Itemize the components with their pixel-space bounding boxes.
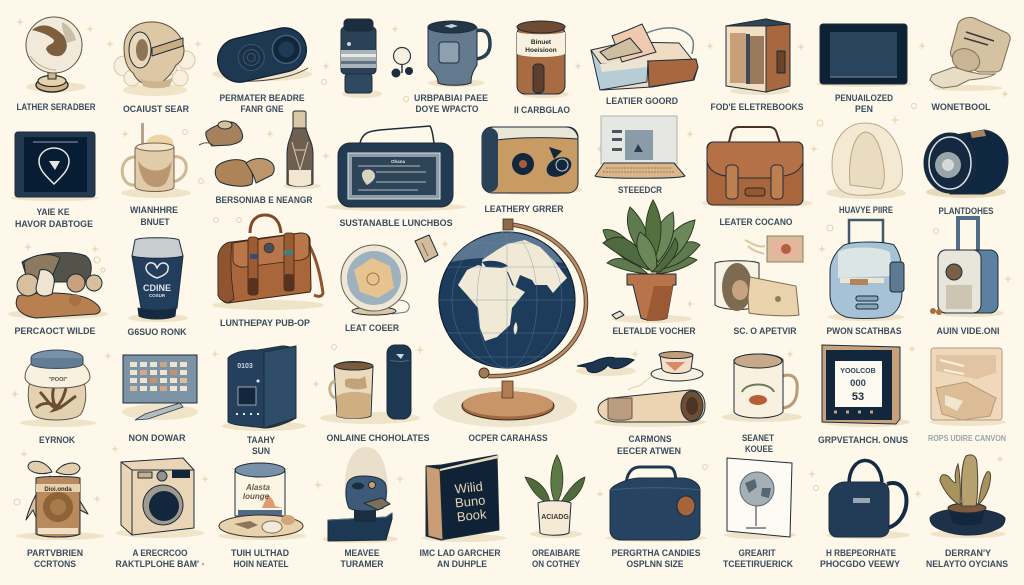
- label: leat coeer: LEAT COEER: [345, 323, 399, 334]
- icon: teacup on saucer: [651, 352, 703, 381]
- label: derran'y nelayto oycians: DERRAN'Y: [945, 548, 992, 559]
- label: permater beadre: [220, 93, 304, 115]
- label: eletalde vocher: ELETALDE VOCHER: [612, 326, 696, 337]
- label: onlaine chohokates: ONLAINE CHOHOLATES: [326, 433, 430, 444]
- label: pwon scathbas: PWON SCATHBAS: [826, 326, 902, 337]
- icon: small leather tag: [415, 235, 438, 262]
- icon: framed display with numbers: [822, 345, 910, 427]
- label: derran'y nelayto oycians: [926, 548, 1008, 570]
- icon: wrapped gift with bow: Dioi.onda: [44, 487, 72, 493]
- icon: retro boombox: [482, 127, 582, 195]
- label: penualiozed pen: [835, 93, 893, 115]
- icon: cactus on base: [930, 455, 1006, 538]
- label: meavee turamer: [340, 548, 384, 570]
- icon: laptop: [595, 116, 685, 178]
- icon: wild bunno book: [422, 455, 506, 542]
- icon: tan podcast head with bubbles: [114, 22, 195, 96]
- label: huavye piire: HUAVYE PIIRE: [839, 205, 893, 216]
- icon: brown briefcase: [702, 127, 812, 208]
- icon: leather satchel: [212, 215, 324, 310]
- label: bersoniab e neangr: BERSONIAB E NEANGR: [216, 195, 313, 206]
- label: grearit tceetiruerick: TCEETIRUERICK: [723, 559, 793, 570]
- label: partvbrien ccrtons: CCRTONS: [34, 559, 76, 570]
- icon: can with food plate: lounge: [243, 492, 270, 501]
- label: auin video.oni: AUIN VIDE.ONI: [936, 326, 1000, 337]
- label: a erecrcoo raktlplohe bam: [116, 548, 204, 570]
- label: ocper carahass: OCPER CARAHASS: [468, 433, 548, 444]
- label: grearit tceetiruerick: GREARIT: [738, 548, 776, 559]
- label: wianhhre bnuet: WIANHHRE: [130, 205, 178, 216]
- label: steeedcr: STEEEDCR: [618, 185, 662, 196]
- icon: cream mug with illustration: [722, 354, 802, 422]
- chart: central world globe: [433, 219, 586, 427]
- icon: steel blue mug: [428, 21, 490, 87]
- label: seanet kouee: [742, 433, 774, 455]
- label: eyrnok: EYRNOK: [39, 435, 75, 446]
- label: urbpabiai paee: DOYE WPACTO: [416, 104, 478, 115]
- icon: framed display with numbers: 53: [852, 391, 864, 403]
- icon: dark tablet: [816, 24, 912, 87]
- icon: paper parcel box: [930, 348, 1006, 426]
- icon: navy tumbler: COSUR: [149, 293, 166, 298]
- label: yaie ke havor dabtoge: [15, 207, 93, 230]
- label: tuih ulthad hoin neatel: [231, 548, 289, 570]
- icon: toy robot under dome: [322, 447, 398, 543]
- label: meavee turamer: MEAVEE: [344, 548, 380, 559]
- label: a erecrcoo raktlplohe bam: A ERECRCOO: [132, 548, 188, 559]
- label: oreaibare on cothey: ON COTHEY: [532, 559, 581, 570]
- icon: navy box device: [222, 346, 306, 431]
- label: leater cocano: LEATER COCANO: [720, 217, 792, 228]
- label: penualiozed pen: PENUAILOZED: [835, 93, 893, 104]
- icon: navy box device: 0103: [237, 363, 253, 370]
- label: h rbepeorhate phocgdo veewy: H RBEPEORHATE: [826, 548, 896, 559]
- icon: bottle: [283, 111, 321, 189]
- icon: sunglasses: [576, 357, 636, 376]
- icon: framed display with numbers: YOOLCOB: [840, 368, 876, 375]
- label: wianhhre bnuet: BNUET: [140, 217, 170, 228]
- icon: pile of wildlife plush: [8, 253, 108, 319]
- label: partvbrien ccrtons: PARTVBRIEN: [27, 548, 83, 559]
- icon: small plant in labelled pot: ACIADG: [541, 514, 569, 521]
- label: oreaibare on cothey: OREAIBARE: [532, 548, 580, 559]
- icon: navy tumbler: CDINE: [143, 283, 171, 293]
- label: leathery grrer: LEATHERY GRRER: [484, 204, 564, 215]
- label: meavee turamer: TURAMER: [340, 559, 384, 570]
- icon: compass globe: [341, 245, 409, 315]
- label: penualiozed pen: PEN: [855, 104, 873, 115]
- icon: scroll and tea glass: [594, 376, 706, 427]
- icon: potted plant: [603, 200, 700, 323]
- icon: small plant in labelled pot: [525, 455, 585, 538]
- icon: greeting card with globe: [724, 458, 796, 539]
- label: yaie ke havor dabtoge: YAIE KE: [36, 207, 70, 218]
- label: h rbepeorhate phocgdo veewy: PHOCGDO VEEWY: [820, 559, 901, 570]
- icon: small suitcase speaker: [930, 218, 1004, 317]
- label: oreaibare on cothey: [532, 548, 581, 570]
- label: permater beadre: PERMATER BEADRE: [220, 93, 304, 104]
- label: permater beadre: FANR GNE: [240, 104, 284, 115]
- label: grpvetahch. onus: GRPVETAHCH. ONUS: [818, 435, 908, 446]
- label: lather seradber: LATHER SERADBER: [16, 102, 96, 113]
- label: partvbrien ccrtons: [27, 548, 83, 570]
- icon: wrapped gift with bow: [16, 461, 104, 540]
- label: pergrtha candies osplnn size: OSPLNN SIZE: [626, 559, 684, 570]
- label: urbpabiai paee: [414, 93, 488, 115]
- label: leatier goord: LEATIER GOORD: [606, 96, 678, 107]
- label: g6suo ronk: G6SUO RONK: [128, 327, 187, 338]
- label: tuih ulthad hoin neatel: TUIH ULTHAD: [231, 548, 289, 559]
- icon: candle tin: Hoeisioon: [525, 47, 557, 54]
- icon: wild bunno book: Buno: [454, 492, 486, 511]
- label: imc lad garcher an duhple: [420, 548, 501, 570]
- icon: earbuds: [392, 48, 413, 78]
- label: carmons eecer atwen: EECER ATWEN: [617, 446, 681, 457]
- icon: candle tin: Binuet: [531, 39, 552, 46]
- icon: wild bunno book: Wilid: [454, 479, 483, 496]
- label: yaie ke havor dabtoge: HAVOR DABTOGE: [15, 219, 93, 230]
- label: percaoct wilde: PERCAOCT WILDE: [14, 326, 96, 337]
- label: a erecrcoo raktlplohe bam: RAKTLPLOHE BAM' ◦: [116, 559, 204, 570]
- label: rops udire canvon: ROPS UDIRE CANVON: [928, 434, 1006, 443]
- label: grearit tceetiruerick: [723, 548, 793, 570]
- icon: digital radio with handle: Ohana: [391, 159, 405, 164]
- icon: tan pouch and key: [930, 17, 1010, 91]
- label: h rbepeorhate phocgdo veewy: [820, 548, 901, 570]
- label: food electrobooks: FOD'E ELETREBOOKS: [710, 102, 804, 113]
- icon: mug with envelope and photo frame: [715, 236, 803, 316]
- label: taahy sun: [247, 435, 276, 457]
- label: tuih ulthad hoin neatel: HOIN NEATEL: [234, 559, 289, 570]
- icon: can with food plate: [218, 463, 306, 540]
- icon: small globe on stand: [26, 17, 86, 92]
- icon: navy portable radio: [606, 467, 706, 542]
- label: imc lad garcher an duhple: IMC LAD GARCHER: [420, 548, 501, 559]
- icon: navy tumbler: [128, 238, 188, 322]
- label: carbglao: II CARBGLAO: [514, 105, 570, 116]
- icon: washing machine: [116, 458, 204, 538]
- label: seanet kouee: KOUEE: [745, 444, 773, 455]
- icon: navy bag mug: [826, 460, 910, 539]
- icon: glass jar mug: [121, 123, 191, 198]
- icon: wild bunno book: Book: [456, 506, 488, 524]
- label: sustanable lunchbos: SUSTANABLE LUNCHBOS: [340, 218, 452, 229]
- icon: can with food plate: Alasta: [245, 483, 271, 492]
- label: taahy sun: SUN: [252, 446, 270, 457]
- icon: glass jar with lid: "POOI": [49, 377, 68, 383]
- icon: digital radio with handle: [326, 126, 466, 211]
- icon: boxed book set: [726, 19, 790, 95]
- label: urbpabiai paee: URBPABIAI PAEE: [414, 93, 488, 104]
- label: taahy sun: TAAHY: [247, 435, 276, 446]
- icon: dark blue bluetooth speaker: [212, 23, 312, 87]
- label: derran'y nelayto oycians: NELAYTO OYCIANS: [926, 559, 1008, 570]
- label: ocaiust sear: OCAIUST SEAR: [123, 104, 189, 115]
- label: wianhhre bnuet: [130, 205, 178, 228]
- icon: tablet with heart shield: [11, 132, 99, 201]
- label: pergrtha candies osplnn size: [612, 548, 700, 570]
- icon: light blue backpack luggage: [828, 220, 904, 321]
- icon: leather keepsakes: [199, 121, 274, 186]
- icon: candle tin: [517, 21, 569, 98]
- icon: dark camera cylinder: [924, 130, 1008, 198]
- icon: leather goods book: [591, 24, 698, 90]
- label: wonetbool: WONETBOOL: [932, 102, 991, 113]
- label: pergrtha candies osplnn size: PERGRTHA CANDIES: [612, 548, 700, 559]
- label: carmons eecer atwen: [617, 434, 681, 457]
- label: seanet kouee: SEANET: [742, 433, 774, 444]
- label: lunthepay pub-op: LUNTHEPAY PUB-OP: [220, 318, 311, 329]
- icon: cream neck pillow: [826, 123, 906, 199]
- icon: calendar and pen: [122, 355, 198, 420]
- label: imc lad garcher an duhple: AN DUHPLE: [437, 559, 487, 570]
- label: plantdohes: PLANTDOHES: [938, 206, 994, 217]
- label: non dowar: NON DOWAR: [128, 433, 186, 444]
- icon: glass jar with lid: [20, 350, 96, 427]
- icon: framed display with numbers: 000: [850, 378, 866, 389]
- label: carmons eecer atwen: CARMONS: [628, 434, 672, 445]
- icon: travel bottle: [341, 19, 382, 98]
- label: sc. o apetvir: SC. O APETVIR: [734, 326, 797, 337]
- icon: ceramic mug and navy thermos: [320, 345, 420, 424]
